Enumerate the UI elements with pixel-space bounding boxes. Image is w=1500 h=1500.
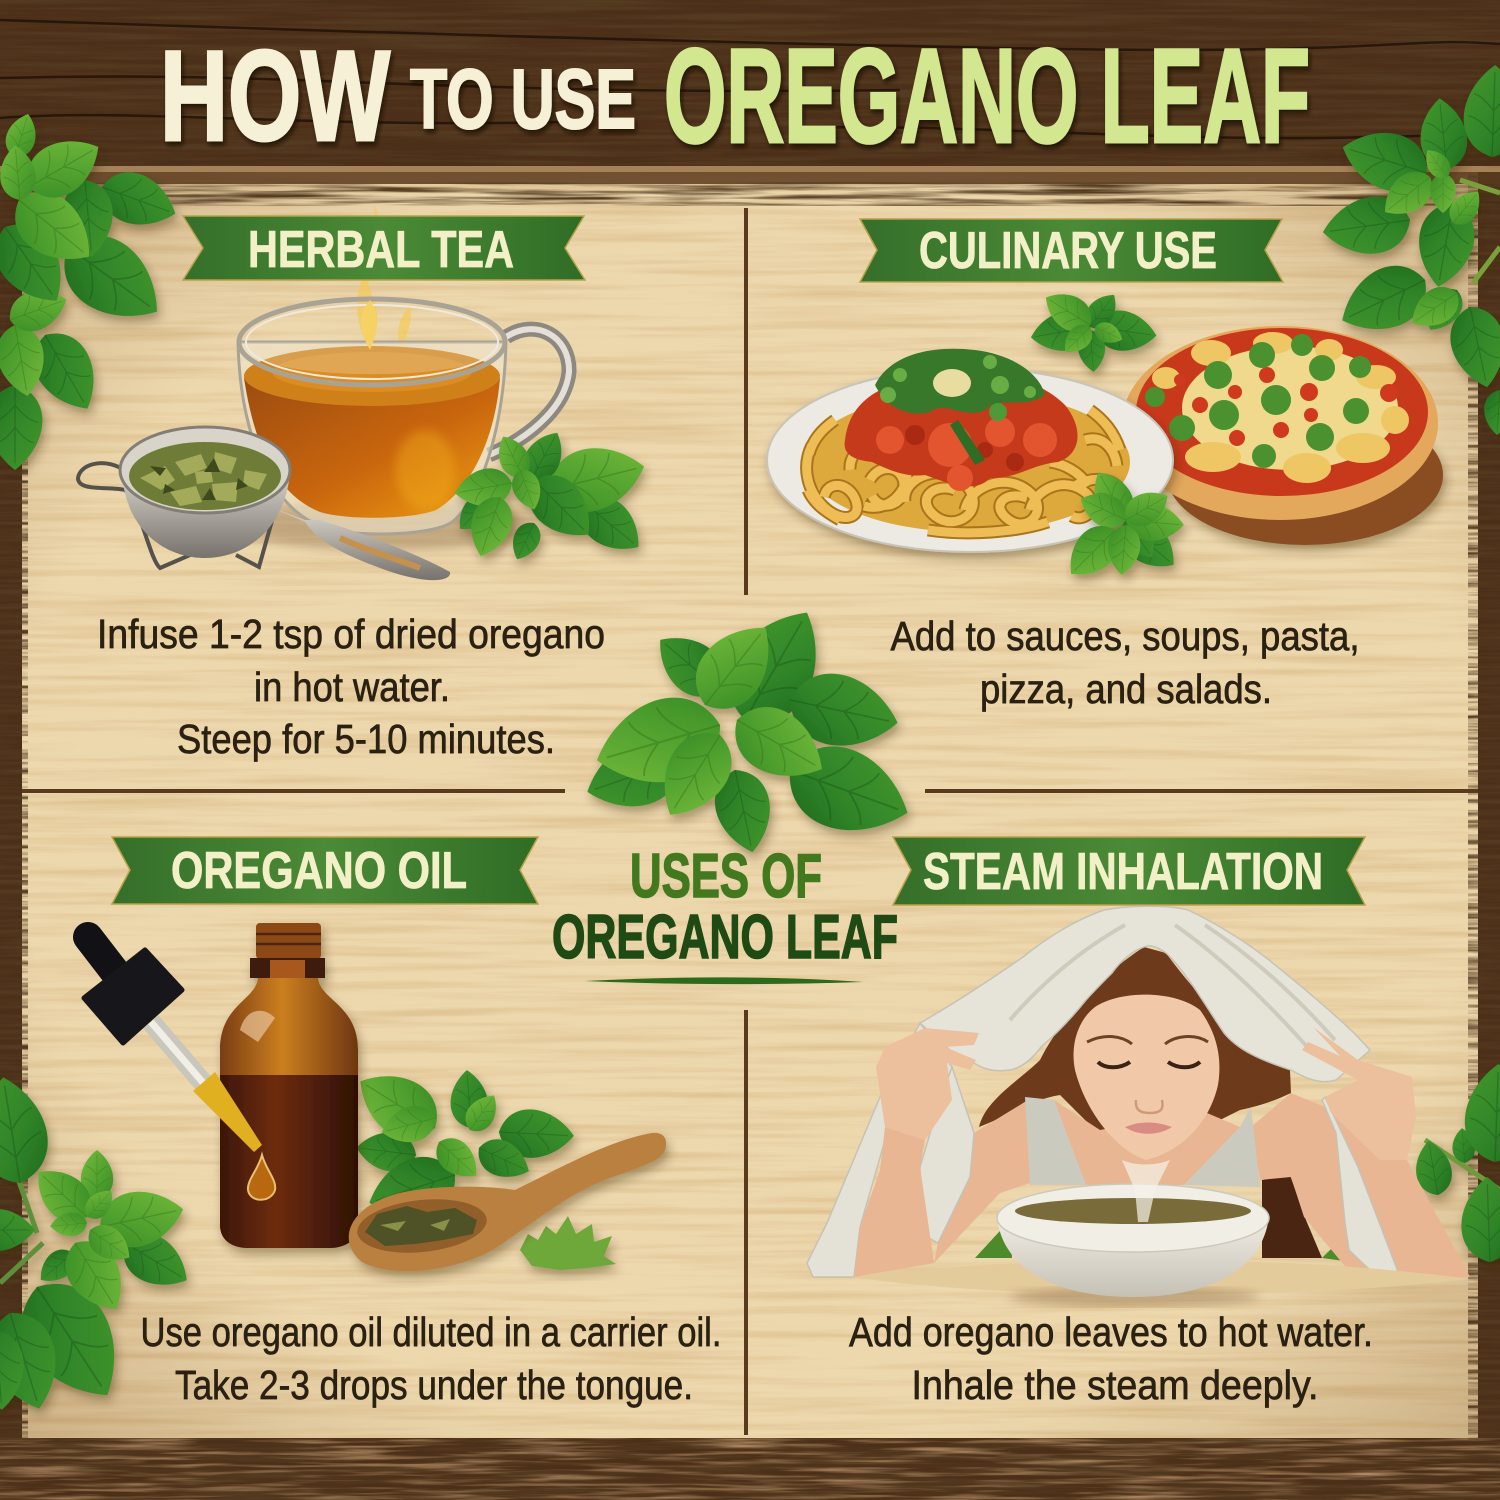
torso and arms — [934, 1093, 1470, 1277]
icon: strainer with dried oregano — [78, 427, 450, 580]
center emblem: uses of oregano leaf — [552, 593, 921, 984]
icon: wooden spoon with herbs — [349, 1133, 666, 1271]
steam rising from tea — [357, 205, 411, 352]
text: culinary instructions — [890, 613, 1360, 712]
text: oil instructions — [140, 1309, 722, 1408]
icon: pasta plate — [767, 349, 1173, 552]
hair — [975, 947, 1352, 1262]
leaves: right edge — [1411, 1063, 1500, 1263]
text: culinary instructions: pizza, and salads. — [980, 666, 1272, 712]
icon: culinary oregano leaves — [1057, 463, 1186, 588]
steam inhalation panel — [807, 837, 1470, 1306]
leaves: bottom left corner — [0, 1072, 199, 1418]
hands — [876, 1027, 1416, 1160]
illustration: woman under towel — [807, 906, 1470, 1295]
towel drapes — [807, 1023, 1400, 1277]
ribbon: culinary use: CULINARY USE — [919, 222, 1217, 280]
text: steam instructions: Add oregano leaves to hot water. — [849, 1309, 1373, 1355]
icon: leaves behind bottle — [345, 1057, 575, 1230]
face — [1074, 995, 1219, 1160]
icon: amber bottle — [220, 923, 358, 1248]
herbal tea panel — [78, 205, 653, 762]
text: oil instructions: Take 2-3 drops under the tongue. — [175, 1362, 693, 1408]
icon: cup of tea — [235, 299, 569, 551]
title: TO USE — [410, 52, 636, 146]
title: HOW — [160, 25, 390, 168]
text: tea instructions — [97, 611, 605, 762]
icon: center oregano leaves — [577, 593, 921, 858]
heading: uses of oregano leaf: USES OF — [630, 842, 822, 911]
text: oil instructions: Use oregano oil diluted in a carrier oil. — [140, 1309, 722, 1355]
icon: pizza — [1122, 326, 1443, 545]
text: steam instructions: Inhale the steam deeply. — [912, 1362, 1318, 1408]
table edge — [854, 1260, 1470, 1295]
panel dividers — [22, 208, 1478, 1435]
left forearm — [854, 1127, 934, 1277]
icon: steaming bowl — [997, 1160, 1269, 1306]
icon: dropper — [84, 937, 275, 1200]
tank top — [1025, 1097, 1260, 1187]
leaves: top left corner — [0, 110, 184, 470]
heading: uses of oregano leaf — [552, 842, 898, 984]
text: tea instructions: in hot water. — [254, 664, 450, 710]
title — [160, 22, 1310, 171]
ribbon: steam inhalation: STEAM INHALATION — [923, 843, 1323, 901]
text: culinary instructions: Add to sauces, soups, pasta, — [890, 613, 1360, 659]
oregano oil panel — [84, 837, 722, 1408]
towel over head — [920, 906, 1370, 1082]
heading: uses of oregano leaf: OREGANO LEAF — [552, 903, 898, 972]
icon: oregano sprig — [1028, 283, 1159, 373]
leaves: top right corner — [1319, 64, 1500, 436]
icon: tea oregano leaves — [450, 424, 653, 565]
text: tea instructions: Infuse 1-2 tsp of dried oregano — [97, 611, 605, 657]
ribbon: oregano oil: OREGANO OIL — [171, 842, 467, 900]
text: steam instructions — [849, 1309, 1373, 1408]
text: tea instructions: Steep for 5-10 minutes. — [177, 716, 555, 762]
culinary use panel — [767, 219, 1443, 712]
ribbon: herbal tea: HERBAL TEA — [248, 221, 514, 279]
